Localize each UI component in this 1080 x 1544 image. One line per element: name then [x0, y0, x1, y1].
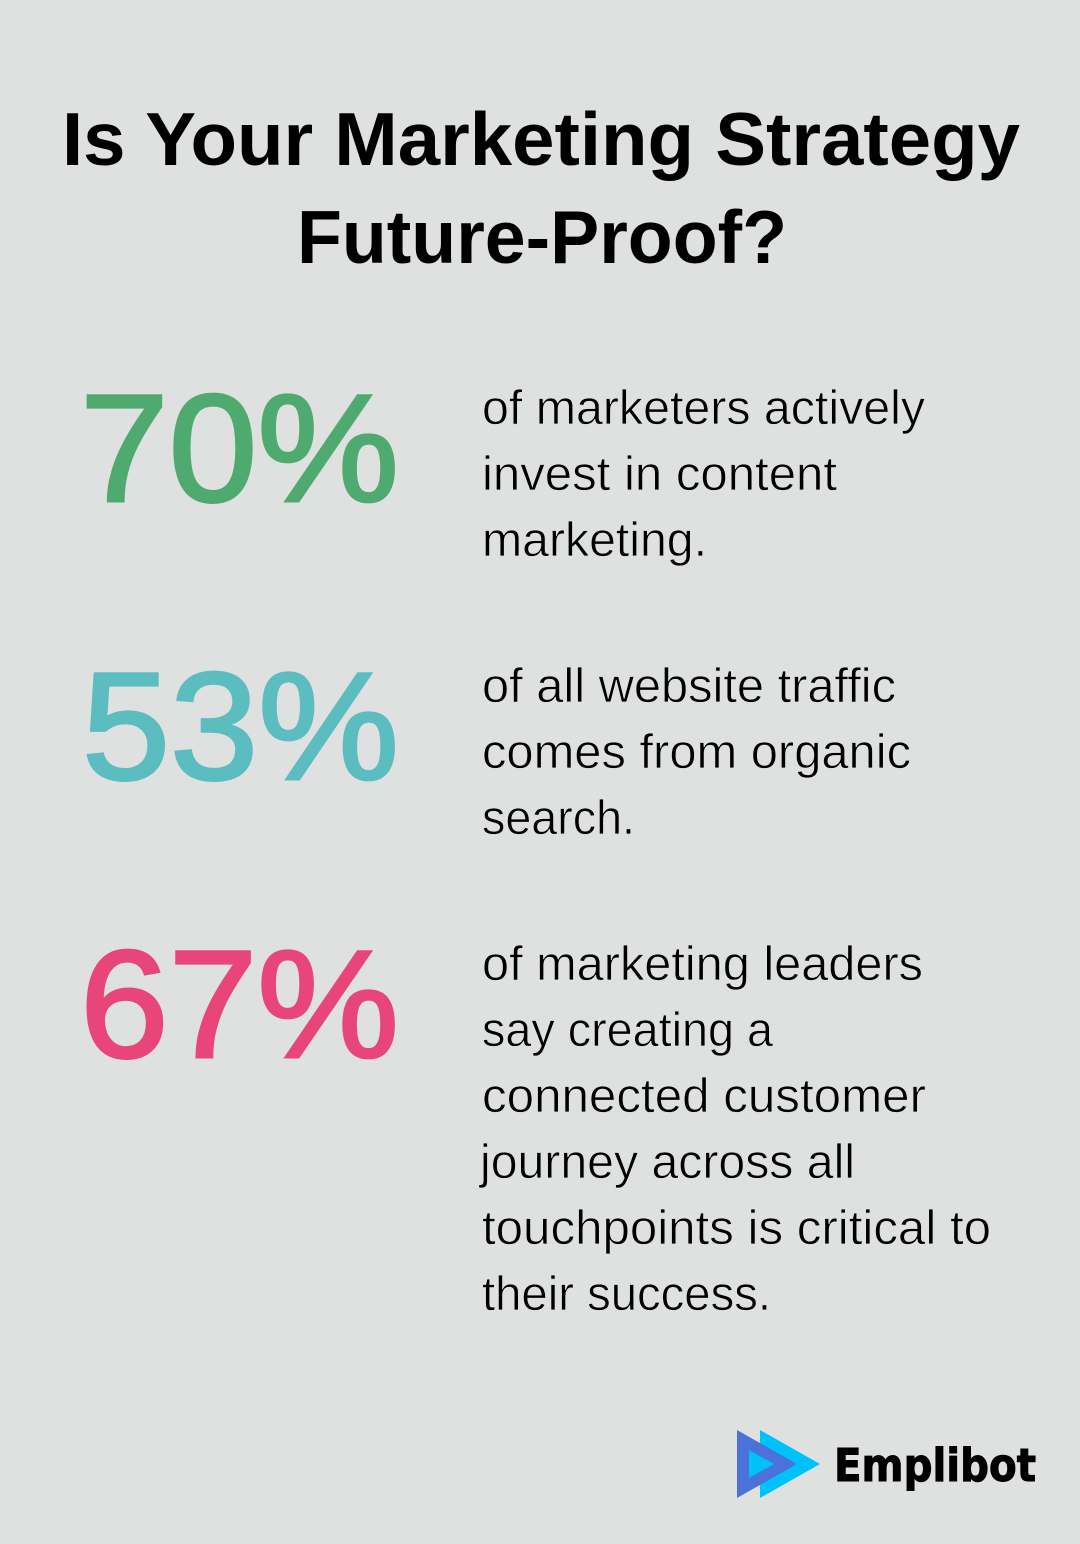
- text: 67% description: connected customer: [482, 1070, 926, 1123]
- text: 67% description: touchpoints is critical to: [482, 1202, 991, 1255]
- stat: 70%: 70%: [80, 363, 399, 534]
- icon: play triangles: [737, 1430, 820, 1498]
- text: 67% description: say creating a: [482, 1004, 773, 1057]
- logo: Emplibot: [737, 1430, 1036, 1498]
- text: 53% description: search.: [482, 792, 635, 845]
- text: 53% description: of all website traffic: [482, 660, 896, 713]
- text: 67% description: [478, 938, 991, 1321]
- text: 67% description: their success.: [482, 1268, 771, 1321]
- text: 70% description: marketing.: [482, 514, 707, 567]
- text: 67% description: of marketing leaders: [482, 938, 923, 991]
- text: 53% description: comes from organic: [482, 726, 911, 779]
- text: 70% description: [482, 382, 925, 567]
- title: Is Your Marketing Strategy: [62, 97, 1020, 181]
- text: 53% description: [482, 660, 911, 845]
- stat: 67%: 67%: [80, 919, 399, 1090]
- text: 67% description: journey across all: [478, 1136, 855, 1189]
- title: [62, 97, 1020, 279]
- stat: 53%: 53%: [82, 641, 399, 812]
- wordmark: Emplibot: [834, 1439, 1036, 1492]
- text: 70% description: of marketers actively: [482, 382, 925, 435]
- title: Future-Proof?: [297, 195, 787, 279]
- text: 70% description: invest in content: [482, 448, 837, 501]
